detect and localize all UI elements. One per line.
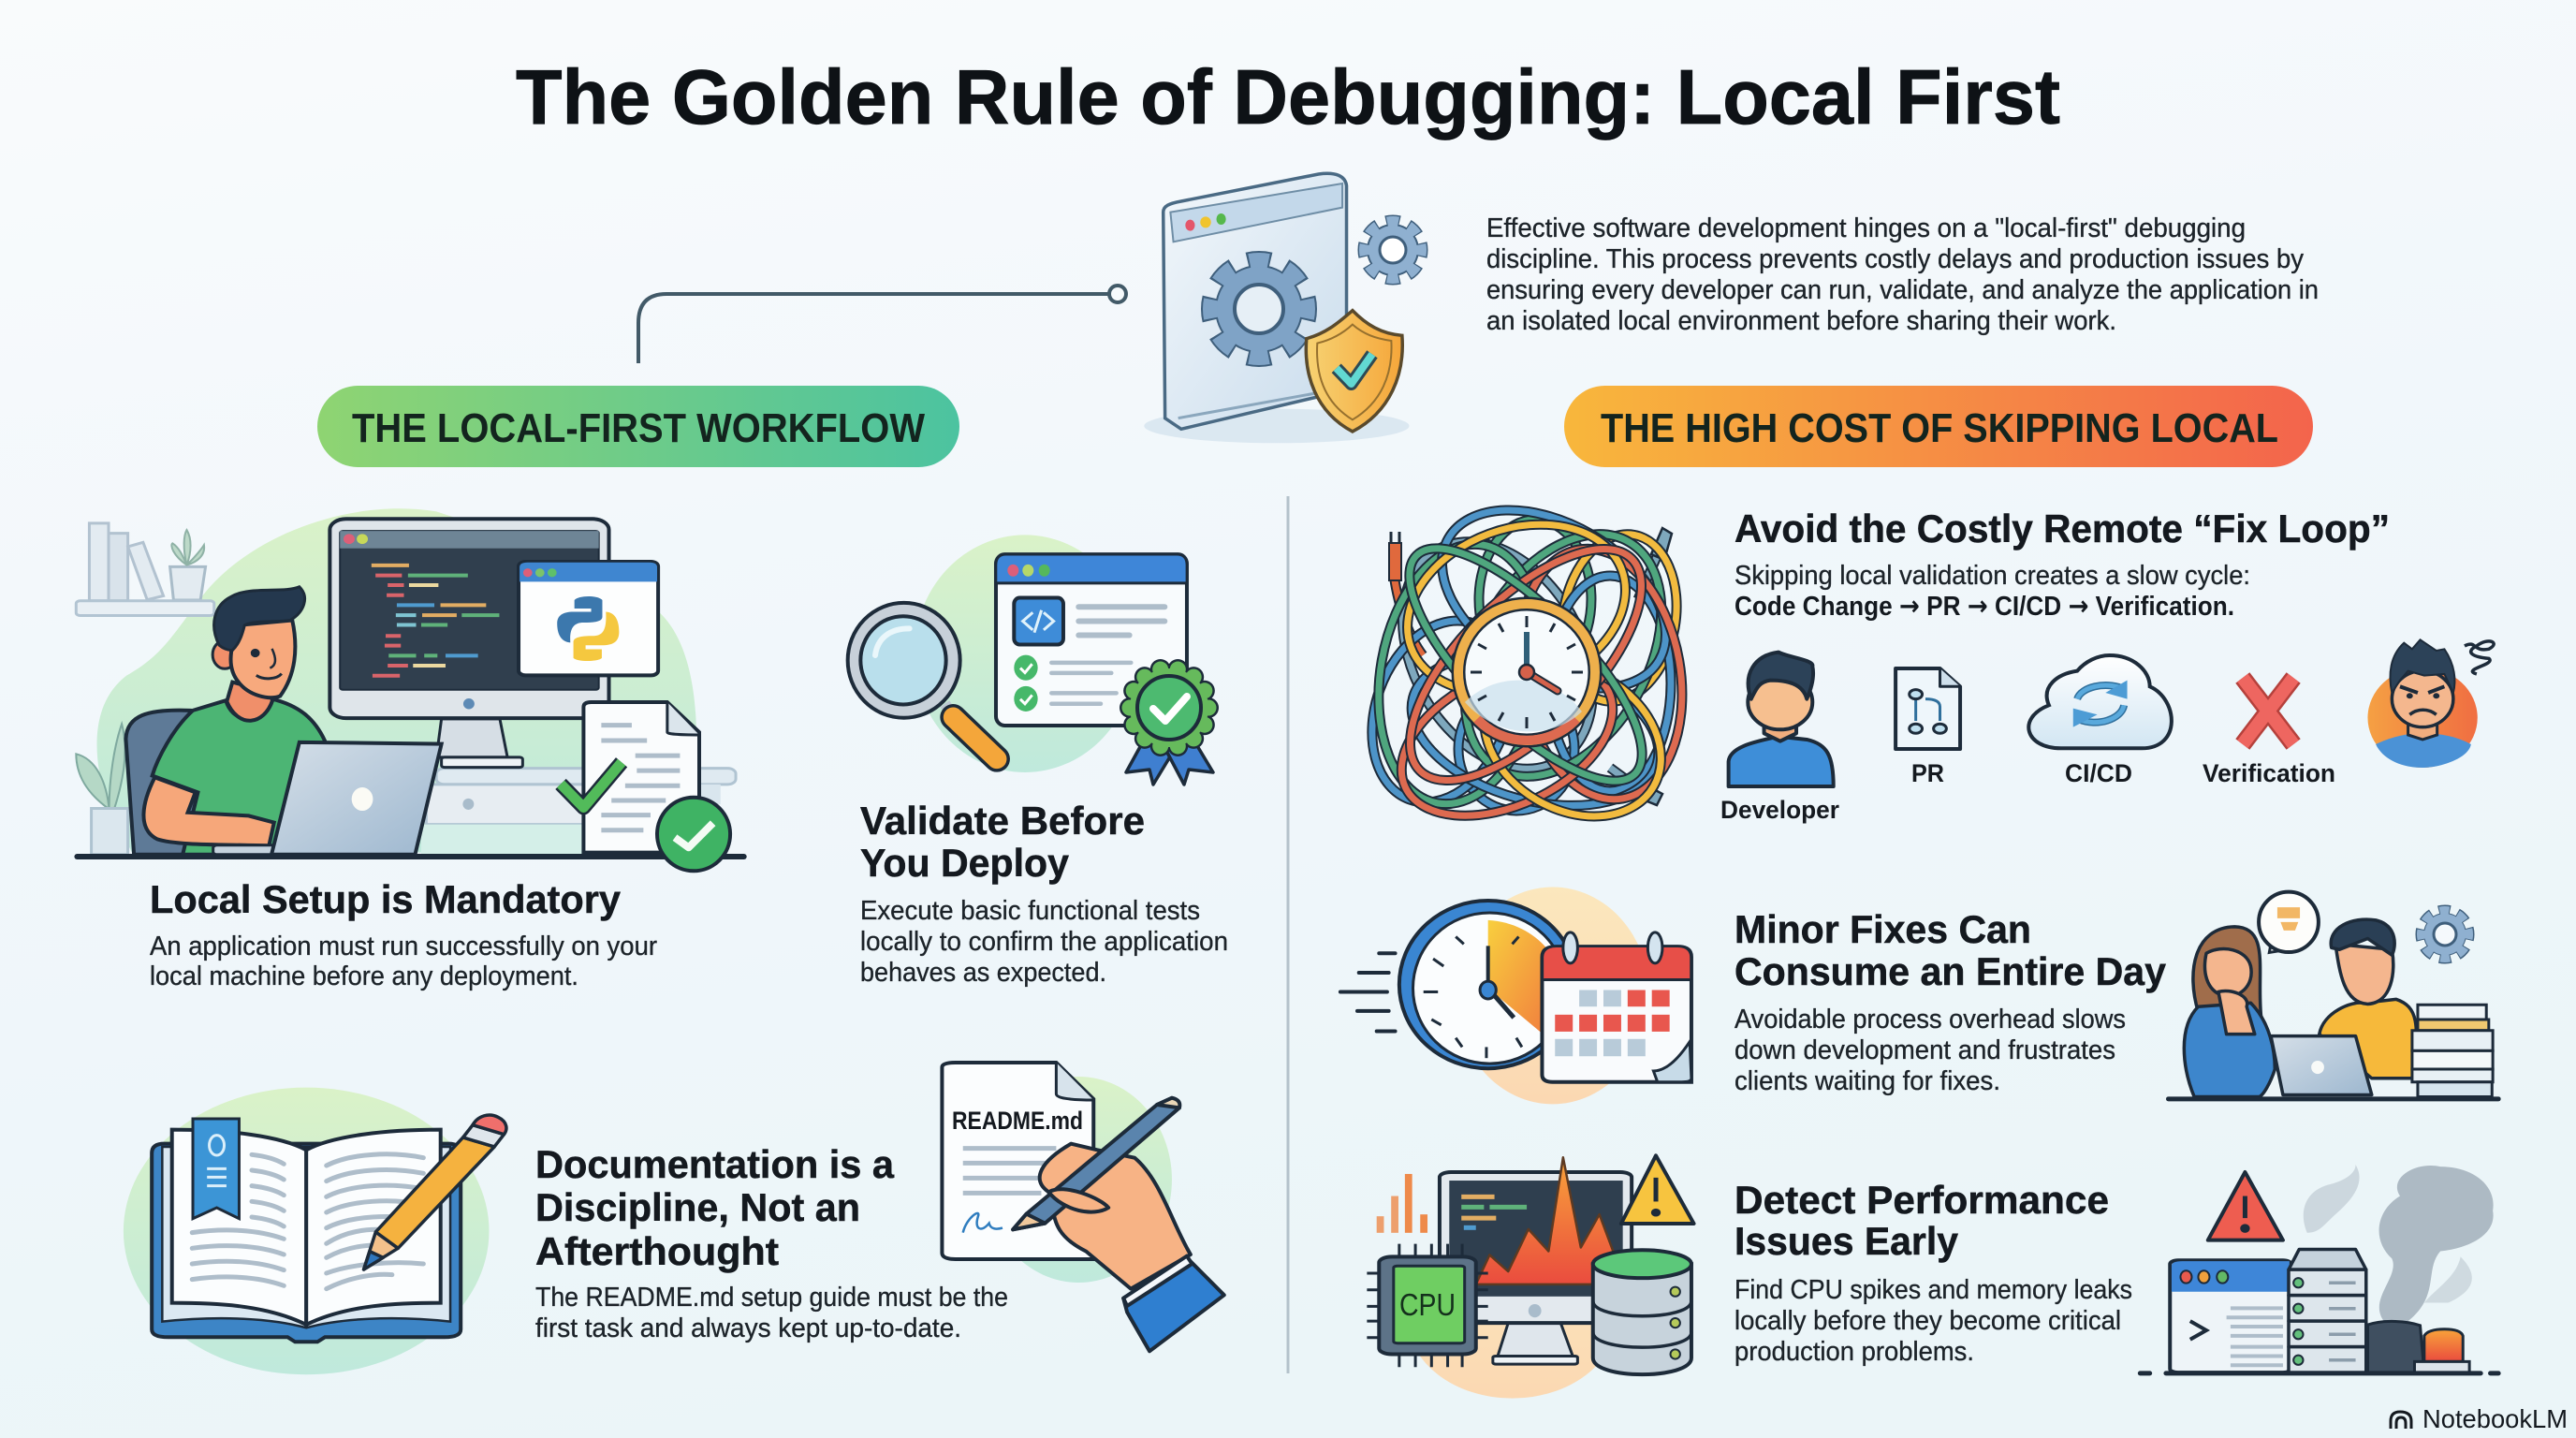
icon: siren [2414, 1329, 2469, 1372]
heading: documentation: Documentation is a [535, 1142, 895, 1186]
icon: green checkmark [561, 762, 622, 807]
heading: performance: Detect Performance [1734, 1178, 2109, 1222]
icon: bookmark [193, 1119, 239, 1219]
smoke [2304, 1165, 2494, 1321]
desk [421, 769, 736, 855]
heading: validate: Validate Before [860, 799, 1145, 843]
text: documentation: The README.md setup guide must be the [535, 1283, 1008, 1313]
step labels [1720, 759, 2335, 824]
clock [1399, 901, 1577, 1068]
icon: shield with check [1306, 311, 1402, 432]
bars [1377, 1174, 1427, 1233]
icon: small gear [1365, 222, 1421, 278]
monitor [329, 519, 609, 768]
icon: CI/CD cloud [2028, 655, 2172, 748]
illustration: frustrated client and developer [2169, 892, 2498, 1099]
monitor with spike [1440, 1157, 1632, 1364]
text: validate: behaves as expected. [860, 958, 1106, 988]
ground line [2169, 1096, 2498, 1101]
document [583, 702, 699, 853]
text: local setup: local machine before any deployment. [150, 961, 578, 991]
text: minor fixes [1734, 1005, 2126, 1096]
heading: minor fixes [1734, 907, 2167, 993]
intro text: ensuring every developer can run, validate, and analyze the application in [1486, 275, 2319, 305]
clock [1458, 604, 1595, 741]
chair and person [125, 587, 325, 855]
open book [152, 1119, 461, 1342]
heading: local setup: Local Setup is Mandatory [150, 877, 622, 921]
step labels: Developer [1720, 796, 1839, 824]
heading: validate [860, 799, 1145, 885]
icon: pencil [364, 1115, 506, 1269]
panel: local setup illustration [76, 508, 744, 871]
client woman [2184, 927, 2275, 1096]
text: validate [860, 896, 1228, 988]
text: performance [1734, 1275, 2132, 1367]
step labels: Verification [2203, 759, 2335, 787]
icon: red warning triangle [2208, 1172, 2283, 1240]
book stack [2412, 1005, 2493, 1096]
panel: validate illustration [848, 535, 1213, 785]
icon: CPU, monitor and database [1367, 1155, 1694, 1399]
icon: check badge [657, 798, 730, 871]
text: local setup: An application must run successfully on your [150, 932, 657, 961]
icon: clock and calendar [1340, 888, 1691, 1104]
text: local setup [150, 932, 657, 991]
section heading: high cost: THE HIGH COST OF SKIPPING LOCAL [1601, 405, 2278, 451]
heading: performance: Issues Early [1734, 1219, 1959, 1263]
icon: tangled cables with clock [1348, 474, 1702, 847]
text: fix loop: Skipping local validation creates a slow cycle: [1734, 561, 2250, 591]
CPU label: CPU [1399, 1287, 1456, 1322]
intro text: discipline. This process prevents costly delays and production issues by [1486, 244, 2304, 274]
text: minor fixes: clients waiting for fixes. [1734, 1066, 2000, 1096]
section heading: workflow: THE LOCAL-FIRST WORKFLOW [352, 405, 925, 451]
section heading: high cost [1564, 386, 2313, 467]
bookshelf [76, 523, 214, 615]
text: performance: production problems. [1734, 1337, 1974, 1367]
text: validate: Execute basic functional tests [860, 896, 1200, 926]
burnt debris [2367, 1321, 2424, 1372]
terminal window [2170, 1260, 2291, 1372]
icon: gear [2422, 911, 2468, 958]
icon: award badge [1126, 668, 1213, 785]
text: performance: Find CPU spikes and memory leaks [1734, 1275, 2132, 1305]
intro text: Effective software development hinges on a "local-first" debugging [1486, 213, 2246, 243]
watermark: NotebookLM: NotebookLM [2422, 1404, 2568, 1433]
intro text [1486, 213, 2319, 336]
text: minor fixes: Avoidable process overhead slows [1734, 1005, 2126, 1034]
heading: documentation [535, 1142, 895, 1273]
code lines [372, 565, 499, 676]
icon: frustrated developer [2367, 639, 2494, 768]
icon: python logo [557, 596, 619, 661]
plugs [1389, 528, 1672, 805]
speech bubble [2259, 892, 2319, 952]
text: performance: locally before they become critical [1734, 1306, 2121, 1336]
readme document [942, 1063, 1093, 1259]
icon: hero window with gears and shield [1144, 173, 1421, 443]
connector line from hero to workflow heading [638, 286, 1126, 363]
plant [76, 724, 124, 809]
server rack [2289, 1250, 2366, 1372]
heading: documentation: Afterthought [535, 1229, 779, 1273]
section heading: workflow [317, 386, 959, 467]
title: The Golden Rule of Debugging: Local First [516, 53, 2060, 140]
heading: validate: You Deploy [860, 841, 1070, 885]
heading: performance [1734, 1178, 2109, 1263]
illustration: smoking production server [2140, 1165, 2498, 1373]
readme label: README.md [952, 1107, 1083, 1135]
icon: warning triangle [1621, 1155, 1694, 1224]
heading: fix loop: Avoid the Costly Remote “Fix Loop” [1734, 506, 2390, 550]
heading: minor fixes: Minor Fixes Can [1734, 907, 2031, 951]
icon: hand writing with pen [1013, 1098, 1224, 1351]
ground line [77, 854, 744, 859]
text: fix loop [1734, 561, 2250, 622]
text: fix loop: Code Change → PR → CI/CD → Verification. [1734, 590, 2234, 622]
python window [519, 562, 658, 675]
magnifying glass [848, 603, 997, 759]
text: minor fixes: down development and frustrates [1734, 1035, 2115, 1065]
speed lines [1340, 953, 1396, 1032]
text: documentation: first task and always kept up-to-date. [535, 1313, 961, 1343]
panel: documentation illustrations [124, 1063, 1224, 1374]
laptop [213, 742, 442, 855]
intro text: an isolated local environment before sharing their work. [1486, 306, 2116, 336]
calendar [1542, 932, 1691, 1082]
icon: developer [1729, 653, 1834, 786]
fix loop step icons [1729, 639, 2494, 786]
icon: PR document [1895, 668, 1960, 749]
icon: CPU chip [1367, 1244, 1488, 1367]
step labels: CI/CD [2065, 759, 2132, 787]
icon: red cross [2243, 678, 2293, 744]
icon: database [1593, 1250, 1691, 1374]
text: documentation [535, 1283, 1008, 1343]
text: validate: locally to confirm the application [860, 927, 1228, 957]
browser window [996, 554, 1187, 726]
vertical divider [1286, 496, 1290, 1373]
heading: minor fixes: Consume an Entire Day [1734, 949, 2167, 993]
heading: documentation: Discipline, Not an [535, 1185, 860, 1229]
step labels: PR [1911, 759, 1944, 787]
icon: large gear [1212, 262, 1306, 356]
developer man [2271, 919, 2416, 1094]
ground line [2140, 1371, 2498, 1375]
